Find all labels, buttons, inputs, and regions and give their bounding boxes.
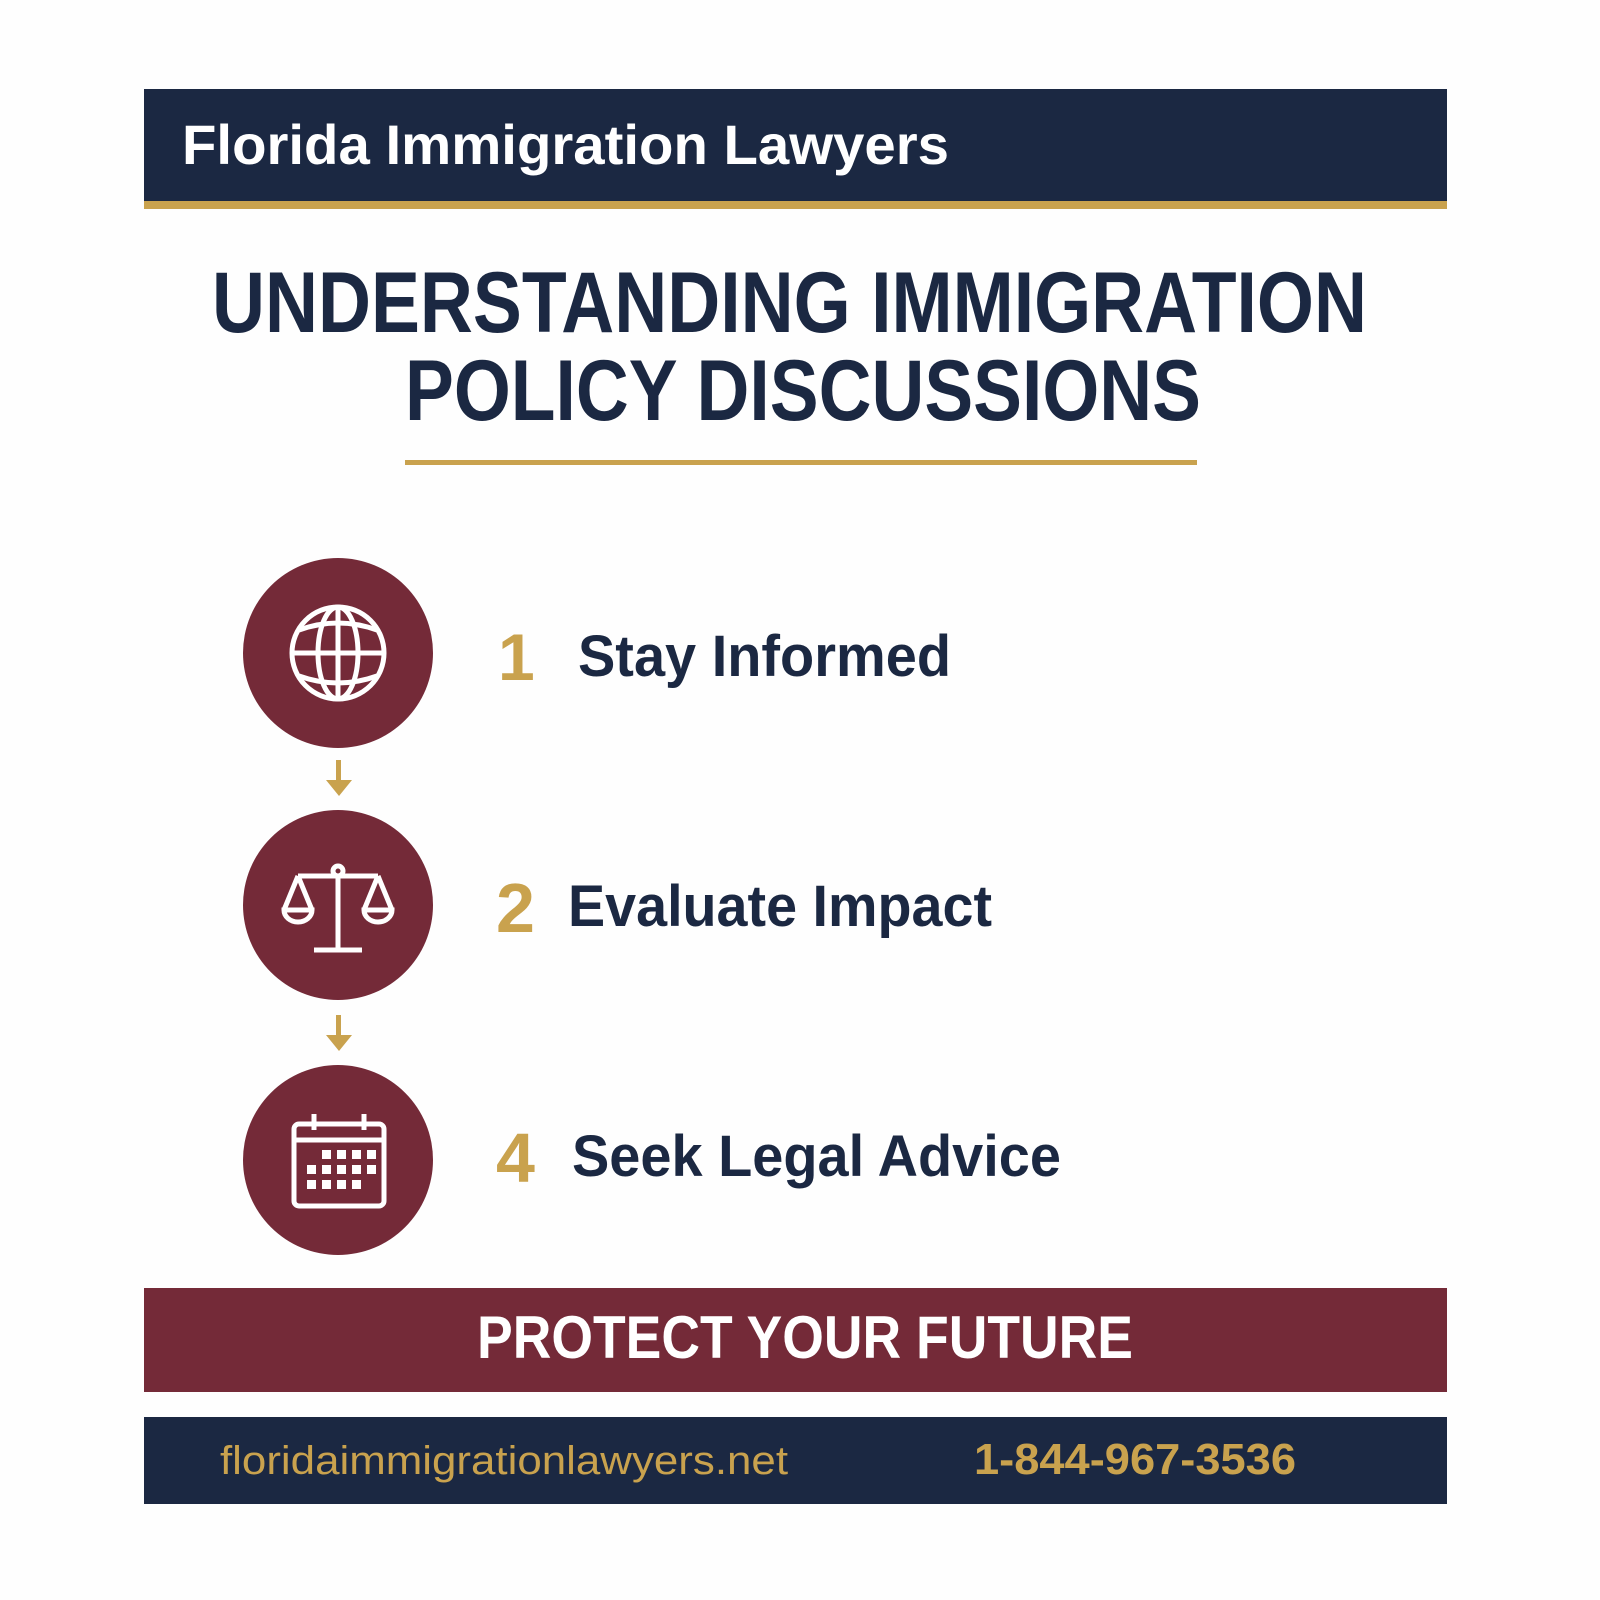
website: floridaimmigrationlawyers.net (220, 1439, 788, 1483)
phone: 1-844-967-3536 (974, 1435, 1296, 1484)
step 1 (243, 558, 951, 748)
number 1: 1 (498, 620, 535, 694)
label: Evaluate Impact: Evaluate Impact (568, 874, 992, 939)
step 4 (243, 1065, 1061, 1255)
number 2: 2 (496, 869, 535, 947)
title underline (405, 460, 1197, 465)
icon: calendar (243, 1065, 433, 1255)
footer contact bar (144, 1417, 1447, 1504)
header banner (144, 89, 1447, 209)
callout banner: protect your future (144, 1288, 1447, 1392)
title (212, 255, 1367, 439)
icon: globe (243, 558, 433, 748)
icon: scales (243, 810, 433, 1000)
title: POLICY DISCUSSIONS (405, 343, 1201, 439)
header text: Florida Immigration Lawyers (182, 113, 949, 176)
number 4: 4 (496, 1119, 535, 1197)
step 2 (243, 810, 992, 1000)
label: Seek Legal Advice: Seek Legal Advice (572, 1124, 1061, 1189)
label: Stay Informed: Stay Informed (578, 624, 951, 689)
callout banner: protect your future: PROTECT YOUR FUTURE (477, 1304, 1133, 1371)
arrow 2 (326, 1015, 352, 1051)
title: UNDERSTANDING IMMIGRATION (212, 255, 1367, 351)
arrow 1 (326, 760, 352, 796)
